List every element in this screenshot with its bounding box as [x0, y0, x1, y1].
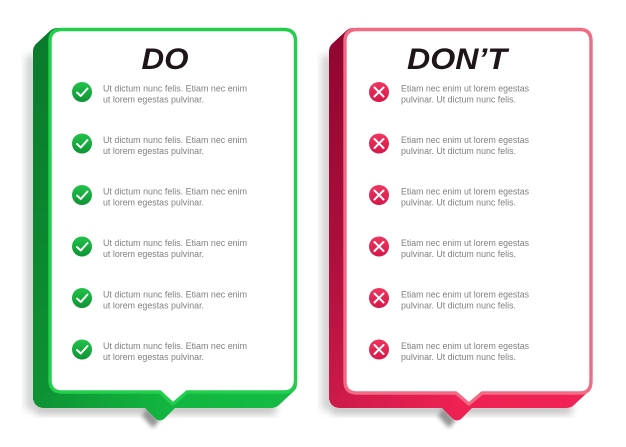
item 5: Ut dictum nunc felis. Etiam nec enim — [103, 290, 247, 300]
item 6: pulvinar. Ut dictum nunc felis. — [401, 352, 516, 362]
panel: do — [26, 28, 297, 428]
item 3: Etiam nec enim ut lorem egestas — [401, 186, 530, 196]
panel: dont — [322, 28, 592, 428]
item 2: Etiam nec enim ut lorem egestas — [401, 135, 530, 145]
item 2: ut lorem egestas pulvinar. — [103, 146, 204, 156]
item 3: ut lorem egestas pulvinar. — [103, 198, 204, 208]
heading: DO: DO — [142, 43, 188, 76]
item 2: Ut dictum nunc felis. Etiam nec enim — [103, 135, 247, 145]
list: dont items — [369, 82, 530, 362]
item 5 — [72, 288, 247, 310]
item 6: Etiam nec enim ut lorem egestas — [401, 341, 530, 351]
item 6 — [72, 340, 247, 362]
item 5: pulvinar. Ut dictum nunc felis. — [401, 300, 516, 310]
item 1: ut lorem egestas pulvinar. — [103, 94, 204, 104]
item 4 — [369, 236, 530, 259]
item 4: ut lorem egestas pulvinar. — [103, 249, 204, 259]
item 2 — [369, 134, 530, 156]
item 4: Etiam nec enim ut lorem egestas — [401, 238, 530, 248]
shadow: do panel — [26, 55, 276, 428]
item 5: ut lorem egestas pulvinar. — [103, 300, 204, 310]
heading: DON'T: DON’T — [407, 43, 510, 76]
item 1: Ut dictum nunc felis. Etiam nec enim — [103, 84, 247, 94]
item 3: pulvinar. Ut dictum nunc felis. — [401, 198, 516, 208]
item 4 — [72, 236, 247, 259]
item 6 — [369, 340, 530, 362]
item 1: Etiam nec enim ut lorem egestas — [401, 84, 530, 94]
card: dont — [345, 30, 591, 404]
item 6: ut lorem egestas pulvinar. — [103, 352, 204, 362]
card: do — [50, 30, 296, 404]
item 5: Etiam nec enim ut lorem egestas — [401, 290, 530, 300]
list: do items — [72, 82, 247, 362]
item 3 — [72, 185, 247, 208]
item 6: Ut dictum nunc felis. Etiam nec enim — [103, 341, 247, 351]
shadow: dont panel — [322, 55, 572, 428]
item 4: pulvinar. Ut dictum nunc felis. — [401, 249, 516, 259]
item 3 — [369, 185, 530, 208]
item 2 — [72, 134, 247, 156]
item 4: Ut dictum nunc felis. Etiam nec enim — [103, 238, 247, 248]
3D body: dont — [329, 28, 592, 420]
3D body: do — [33, 28, 297, 420]
item 1: pulvinar. Ut dictum nunc felis. — [401, 94, 516, 104]
item 1 — [369, 82, 530, 104]
item 3: Ut dictum nunc felis. Etiam nec enim — [103, 186, 247, 196]
item 2: pulvinar. Ut dictum nunc felis. — [401, 146, 516, 156]
item 1 — [72, 82, 247, 104]
item 5 — [369, 288, 530, 310]
